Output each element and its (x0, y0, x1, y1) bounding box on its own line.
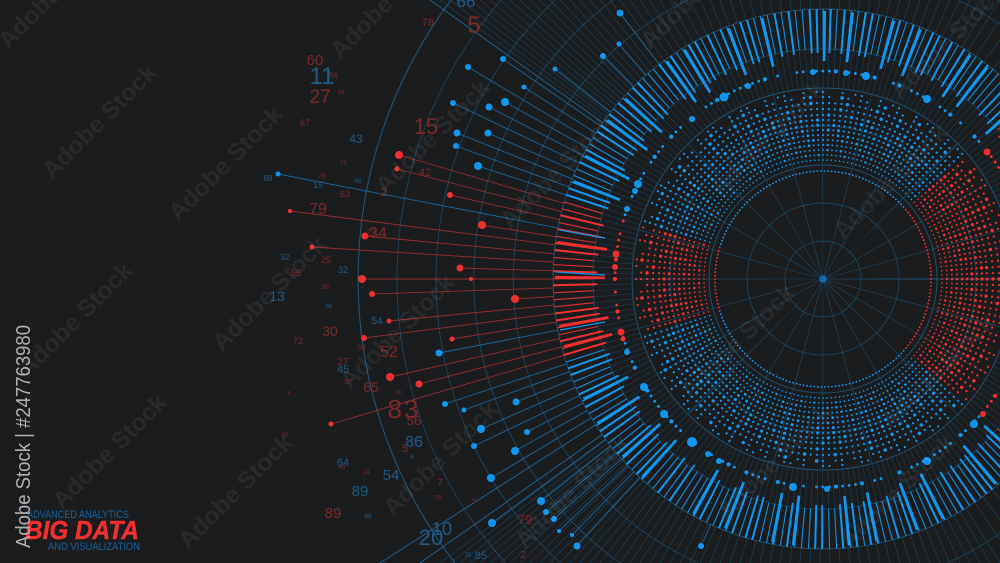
icon: centre hub glow (820, 276, 826, 282)
large ring dots: blue (624, 69, 978, 492)
watermarks: Adobe Stock (495, 109, 621, 234)
dotted ring: blue (615, 71, 1000, 487)
blue scattered numbers: 45 (337, 364, 349, 376)
watermarks: Adobe Stock (47, 389, 173, 514)
watermarks: Adobe Stock (207, 231, 333, 356)
red scattered numbers: 14 (363, 470, 370, 476)
red scattered numbers: 73 (340, 161, 347, 167)
watermarks: Adobe Stock (828, 119, 954, 244)
radial grid lines (440, 0, 1000, 563)
watermarks: Adobe Stock (335, 269, 461, 394)
blue scattered numbers: 54 (383, 467, 399, 484)
heading: big data: BIG DATA (25, 515, 139, 545)
blue scattered numbers: 85 (475, 550, 487, 562)
red scattered numbers: 37 (344, 379, 352, 386)
dot matrix: red (635, 160, 1000, 400)
blue scattered numbers: 15 (313, 180, 323, 190)
concentric rings (358, 0, 1000, 563)
red scattered numbers: 63 (340, 189, 350, 199)
red scattered numbers: 27 (309, 87, 331, 108)
red scattered numbers: 34 (369, 225, 387, 242)
red scattered numbers: 9 (472, 498, 476, 505)
red scattered numbers: 79 (309, 201, 327, 218)
blue scattered numbers: 11 (310, 63, 334, 90)
watermarks: Adobe Stock (163, 101, 289, 226)
blue scattered numbers: 20 (419, 525, 443, 550)
red scattered numbers: 78 (422, 17, 434, 29)
red scattered numbers: 2 (520, 550, 526, 561)
large ring dots: red (612, 148, 990, 417)
red scattered numbers: 56 (291, 268, 301, 278)
red scattered numbers: 73 (366, 228, 376, 238)
red scattered numbers: 25 (321, 255, 331, 265)
red scattered numbers: 83 (388, 394, 420, 424)
red scattered numbers: 8 (288, 391, 291, 397)
blue scattered numbers: 64 (337, 457, 349, 469)
watermarks: Adobe Stock (705, 76, 831, 201)
dotted ring: red (612, 142, 1000, 416)
blue scattered numbers: 89 (365, 514, 372, 520)
red scattered numbers: 36 (321, 284, 329, 291)
red scattered numbers: 78 (318, 173, 326, 180)
red scattered numbers: 43 (339, 465, 346, 471)
red leader lines (292, 156, 564, 424)
blue leader lines (280, 0, 712, 563)
dot matrix: blue (644, 91, 964, 467)
blue scattered numbers: 13 (269, 288, 285, 304)
watermarks: Adobe Stock (378, 396, 504, 521)
heading: advanced analytics: ADVANCED ANALYTICS (27, 509, 129, 521)
blue scattered numbers: 54 (371, 316, 383, 327)
red scattered numbers: 5 (402, 443, 408, 455)
radial bar ring: blue (573, 29, 1000, 529)
red scattered numbers: 53 (358, 345, 366, 352)
blue scattered numbers: 35 (465, 553, 472, 559)
red scattered numbers: 60 (307, 52, 323, 69)
blue scattered numbers: 88 (264, 174, 273, 183)
blue data points (276, 10, 704, 550)
radial bar ring: red (553, 127, 1000, 432)
watermarks: Adobe Stock (675, 279, 801, 404)
watermarks: Adobe Stock (37, 59, 163, 184)
red scattered numbers: 89 (325, 505, 341, 522)
blue accent bars in red sector (556, 230, 605, 330)
red scattered numbers: 7 (437, 478, 443, 489)
red scattered numbers: 49 (338, 90, 345, 96)
red scattered numbers: 65 (363, 379, 379, 395)
red scattered numbers: 56 (407, 413, 421, 428)
red scattered numbers: 27 (337, 357, 349, 368)
red data points (288, 151, 519, 426)
watermarks: Adobe Stock (510, 429, 636, 554)
blue scattered numbers (264, 0, 487, 562)
watermarks: Adobe Stock (13, 257, 139, 382)
watermarks: Adobe Stock (875, 309, 1000, 434)
red scattered numbers: 84 (329, 71, 338, 80)
blue scattered numbers: 10 (432, 519, 452, 539)
watermarks: Adobe Stock (173, 429, 299, 554)
red scattered numbers: 72 (293, 336, 303, 346)
blue scattered numbers: 43 (349, 132, 363, 146)
red scattered numbers: 86 (396, 390, 402, 396)
blue scattered numbers: 32 (281, 253, 290, 262)
red scattered numbers (282, 12, 532, 561)
red scattered numbers: 5 (467, 12, 481, 39)
red scattered numbers: 42 (419, 167, 431, 179)
red scattered numbers: 79 (518, 512, 532, 527)
red scattered numbers: 30 (322, 323, 338, 339)
blue scattered numbers: 86 (405, 434, 423, 451)
blue scattered numbers: 32 (338, 265, 348, 275)
stock id label: Adobe Stock | #247763980 (13, 325, 35, 548)
watermarks: Adobe Stock (712, 399, 838, 524)
red scattered numbers: 76 (434, 495, 442, 502)
blue scattered numbers: 89 (352, 483, 368, 500)
blue scattered numbers: 4 (410, 455, 414, 461)
red scattered numbers: 15 (414, 114, 438, 139)
watermarks: Adobe Stock (370, 74, 496, 199)
red scattered numbers: 87 (300, 118, 310, 128)
blue scattered numbers: 66 (355, 179, 362, 185)
red scattered numbers: 2 (381, 185, 388, 199)
red scattered numbers: 52 (380, 344, 398, 361)
watermarks: Adobe Stock (835, 429, 961, 554)
heading: and visualization: AND VISUALIZATION (48, 541, 140, 553)
red scattered numbers: 60 (282, 433, 289, 439)
blue scattered numbers: 66 (326, 304, 333, 310)
